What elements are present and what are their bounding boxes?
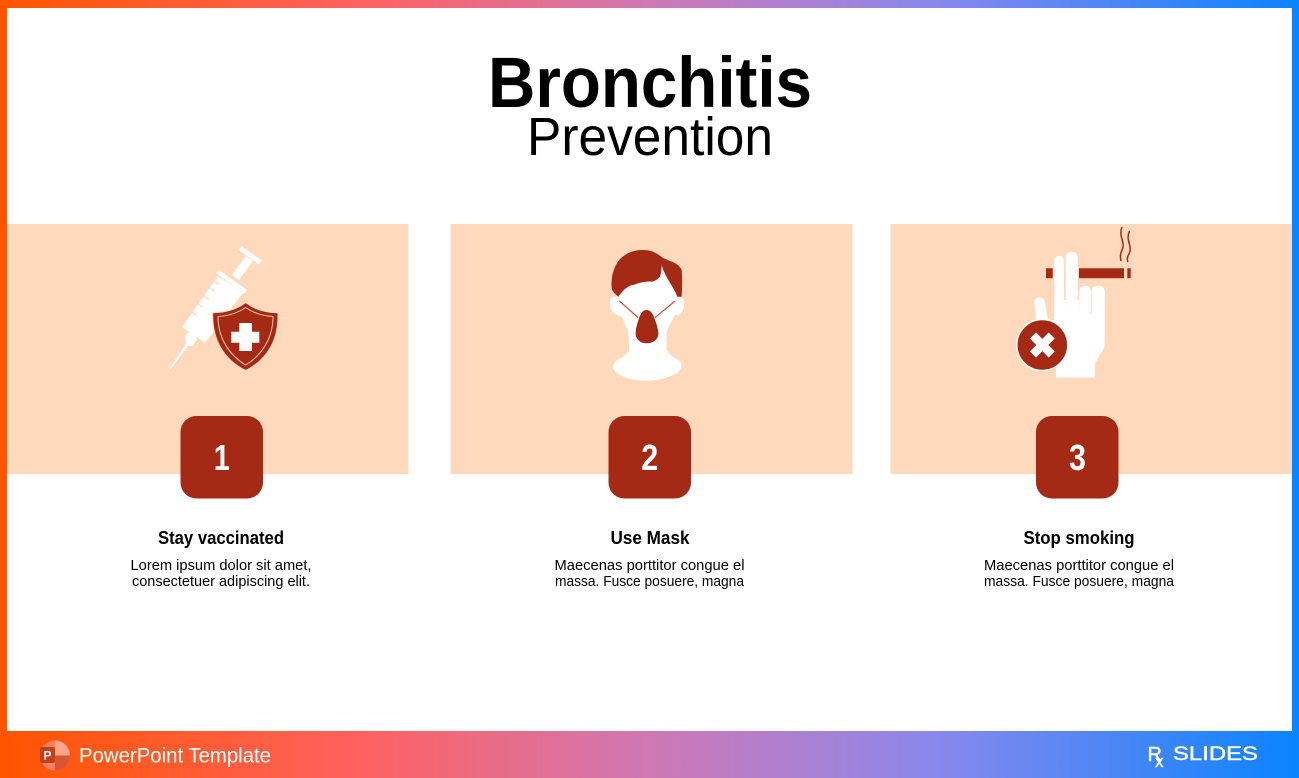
brand logo: SLIDES [1173, 744, 1258, 765]
icon: powerpoint logo [40, 740, 70, 770]
panel: stay vaccinated [7, 224, 408, 590]
panel: use mask [450, 224, 852, 590]
text block 3: Maecenas porttitor congue el [984, 558, 1174, 574]
panel background 1 [7, 224, 408, 474]
icon: syringe with shield [169, 246, 278, 370]
text block 3: massa. Fusce posuere, magna [984, 574, 1175, 590]
number badge 1 [180, 416, 263, 498]
brand logo [1148, 744, 1258, 771]
icon: powerpoint logo: P [43, 748, 52, 762]
text block 2 [554, 558, 745, 590]
text block 2: Maecenas porttitor congue el [554, 558, 744, 574]
title: Bronchitis [488, 44, 812, 123]
panel background 3 [890, 224, 1292, 474]
heading: stop smoking: Stop smoking [1024, 528, 1134, 548]
number badge 2: 2 [641, 437, 658, 478]
number badge 3: 3 [1069, 437, 1086, 478]
text block 1: Lorem ipsum dolor sit amet, [130, 558, 312, 574]
text block 3 [984, 558, 1175, 590]
icon: head with mask [610, 250, 684, 381]
title [488, 44, 812, 167]
number badge 3 [1036, 416, 1118, 498]
footer label: PowerPoint Template [79, 744, 271, 768]
number badge 2 [608, 416, 691, 498]
title: Prevention [527, 107, 773, 167]
heading: use mask: Use Mask [610, 528, 690, 548]
text block 2: massa. Fusce posuere, magna [555, 574, 745, 590]
icon: hand with cigarette [1017, 227, 1131, 378]
number badge 1: 1 [214, 437, 230, 478]
heading: stay vaccinated: Stay vaccinated [158, 528, 284, 548]
text block 1: consectetuer adipiscing elit. [132, 574, 310, 590]
panel background 2 [450, 224, 852, 474]
brand logo: x [1155, 752, 1164, 771]
text block 1 [130, 558, 312, 590]
brand logo: R [1148, 744, 1162, 766]
panel: stop smoking [890, 224, 1292, 590]
